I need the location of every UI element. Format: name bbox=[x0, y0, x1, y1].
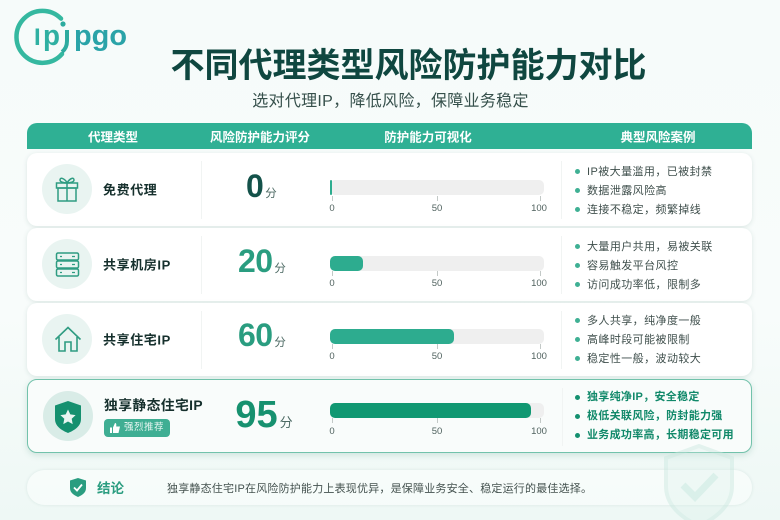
icon: shield star bbox=[43, 391, 93, 441]
badge: recommended: 强烈推荐 bbox=[124, 422, 164, 433]
bar: dedicated static residential IP bbox=[330, 403, 544, 418]
text: 100 bbox=[531, 351, 547, 362]
table header bbox=[27, 123, 752, 149]
list: shared residential IP risks: 稳定性一般，波动较大 bbox=[587, 352, 701, 364]
list: shared residential IP risks: 多人共享，纯净度一般 bbox=[587, 315, 701, 327]
list: free proxy risks: 数据泄露风险高 bbox=[587, 184, 667, 196]
name: 独享静态住宅IP bbox=[104, 398, 203, 413]
row: free proxy bbox=[27, 153, 752, 226]
list: shared datacenter IP risks: 访问成功率低，限制多 bbox=[587, 278, 701, 290]
list: dedicated static residential IP benefits: 独享纯净IP，安全稳定 bbox=[587, 391, 700, 403]
bar: free proxy bbox=[330, 180, 544, 195]
score: 60分 bbox=[238, 317, 286, 353]
text: 100 bbox=[531, 203, 547, 214]
header: visualization: 防护能力可视化 bbox=[384, 130, 472, 144]
header: score: 风险防护能力评分 bbox=[210, 130, 310, 144]
header: proxy type: 代理类型 bbox=[88, 130, 138, 144]
list: free proxy risks: 连接不稳定，频繁掉线 bbox=[587, 204, 701, 216]
name: 免费代理 bbox=[103, 182, 157, 197]
subtitle: 选对代理IP，降低风险，保障业务稳定 bbox=[252, 93, 529, 110]
list: shared residential IP risks: 高峰时段可能被限制 bbox=[587, 334, 690, 346]
title: 不同代理类型风险防护能力对比 bbox=[170, 46, 646, 84]
list: shared datacenter IP risks: 大量用户共用，易被关联 bbox=[587, 240, 713, 252]
list: free proxy risks bbox=[575, 166, 712, 216]
text: 50 bbox=[432, 426, 442, 437]
icon: gift bbox=[42, 164, 92, 214]
list: shared datacenter IP risks: 容易触发平台风控 bbox=[587, 260, 678, 272]
text: 50 bbox=[432, 278, 442, 289]
logo: ipipgo: I bbox=[34, 24, 41, 51]
text: 100 bbox=[531, 278, 547, 289]
header: risk cases: 典型风险案例 bbox=[620, 130, 696, 144]
text: 0 bbox=[329, 351, 335, 362]
icon: check shield bbox=[70, 478, 86, 497]
text: 0 bbox=[329, 203, 335, 214]
badge: recommended bbox=[104, 419, 170, 436]
name: 共享机房IP bbox=[103, 257, 171, 272]
list: dedicated static residential IP benefits: 极低关联风险，防封能力强 bbox=[587, 410, 723, 422]
list: shared residential IP risks bbox=[575, 314, 701, 364]
text: 0 bbox=[329, 278, 335, 289]
text: 50 bbox=[432, 203, 442, 214]
bar: shared datacenter IP bbox=[330, 256, 544, 270]
logo: ipipgo: p bbox=[43, 20, 60, 52]
text: 0 bbox=[329, 426, 335, 437]
row: shared datacenter IP bbox=[27, 228, 752, 301]
list: shared datacenter IP risks bbox=[575, 240, 713, 290]
list: dedicated static residential IP benefits: 业务成功率高，长期稳定可用 bbox=[587, 429, 734, 441]
name: 共享住宅IP bbox=[103, 332, 171, 347]
bar: shared residential IP bbox=[330, 329, 544, 344]
icon: server bbox=[42, 239, 92, 289]
conclusion text: 独享静态住宅IP在风险防护能力上表现优异，是保障业务安全、稳定运行的最佳选择。 bbox=[167, 483, 592, 495]
logo: ipipgo: pgo bbox=[74, 20, 127, 52]
row: shared residential IP bbox=[27, 303, 752, 376]
score: 95分 bbox=[235, 394, 293, 436]
score: 20分 bbox=[238, 243, 286, 279]
conclusion bar bbox=[27, 470, 752, 505]
score: 0分 bbox=[246, 168, 277, 204]
watermark: shield with check bbox=[664, 444, 734, 520]
list: free proxy risks: IP被大量滥用，已被封禁 bbox=[587, 166, 712, 178]
text: 50 bbox=[432, 351, 442, 362]
icon: house bbox=[42, 314, 92, 364]
conclusion label: 结论 bbox=[97, 481, 124, 496]
logo: ipipgo bbox=[14, 8, 127, 66]
text: 100 bbox=[531, 426, 547, 437]
row: dedicated static residential IP (highlighted) bbox=[27, 379, 752, 453]
